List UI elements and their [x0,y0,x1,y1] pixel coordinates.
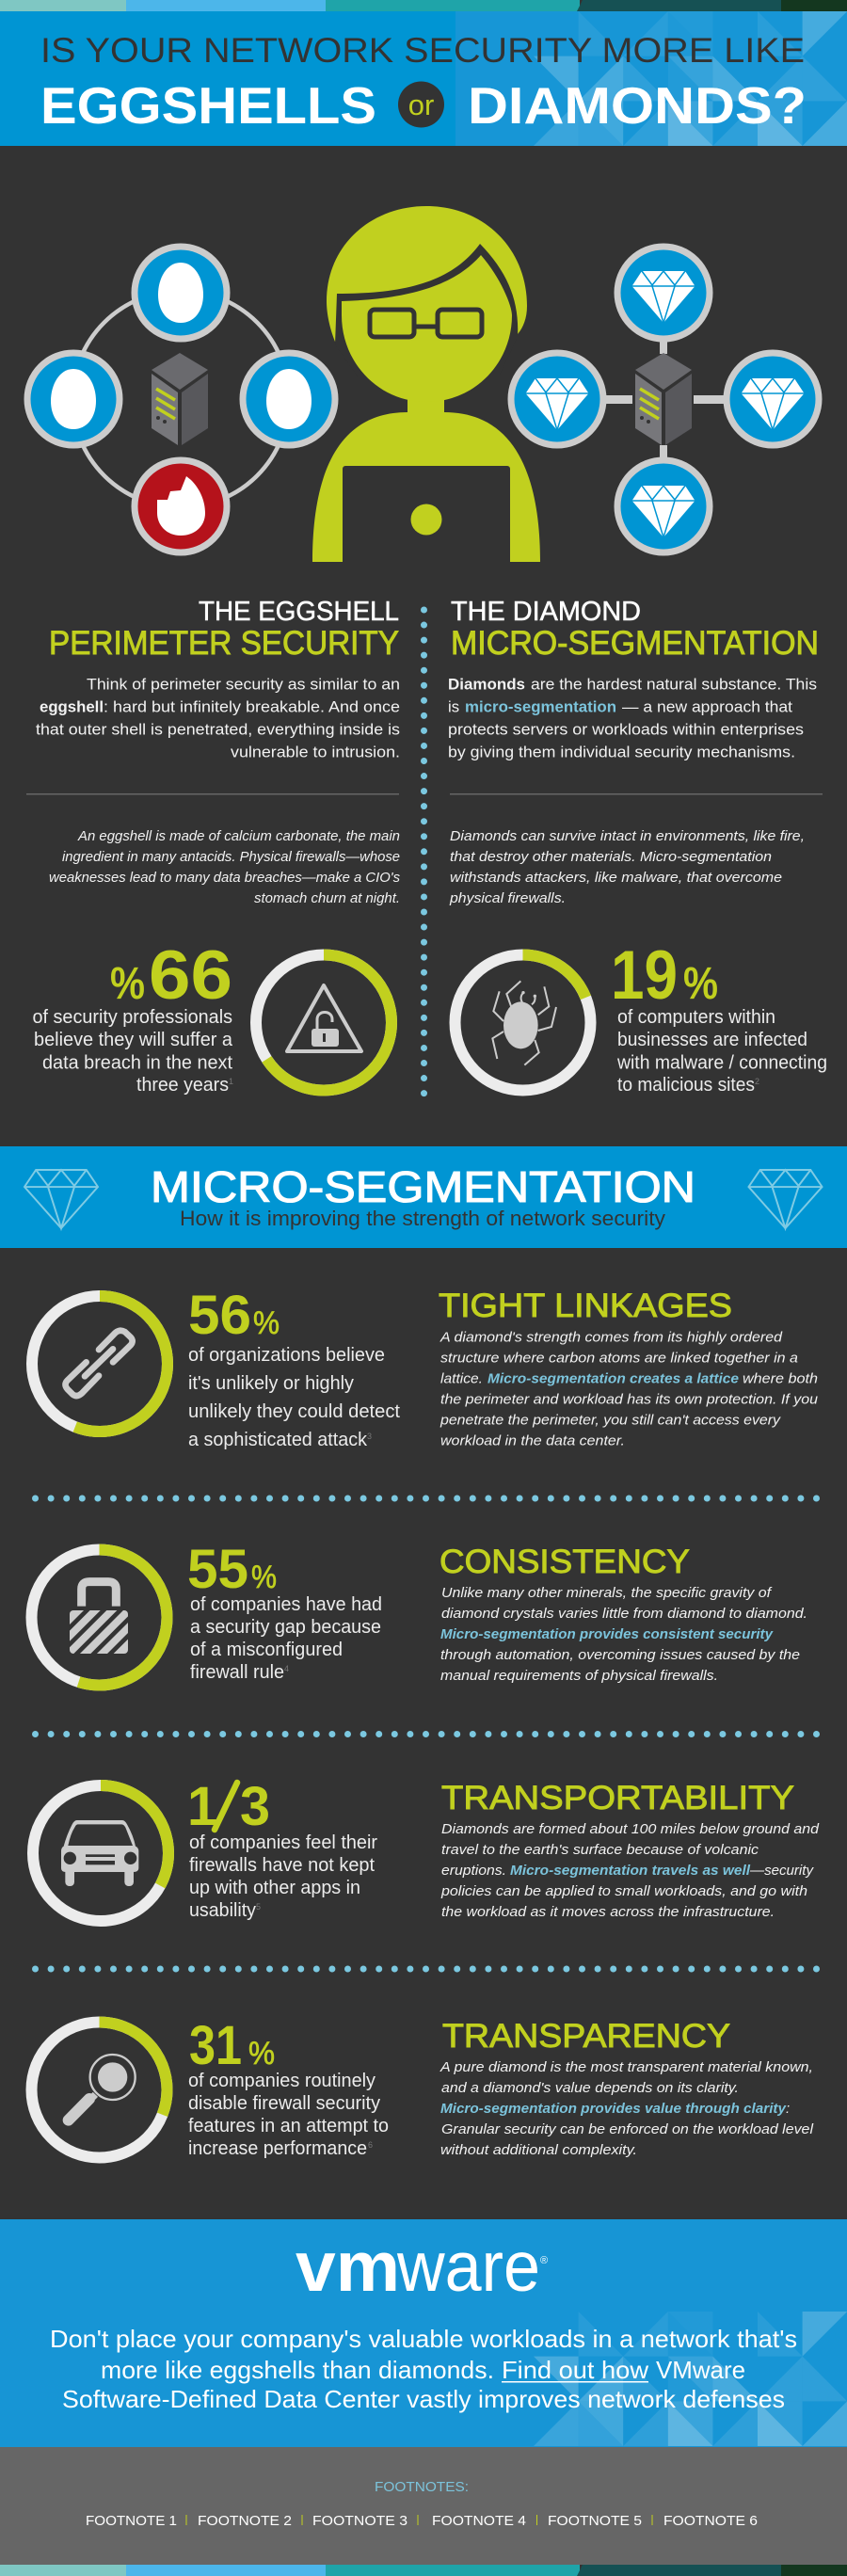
text block: transparency: : [786,2101,790,2117]
icon: striped padlock [70,1577,128,1654]
icon: diamond bottom [617,460,710,552]
stat: one third: of companies feel their [189,1832,377,1853]
text block: eggshell fact [49,828,400,906]
text block: eggshell fact: ingredient in many antacids. Physical firewalls—whose [62,849,400,865]
text block: diamond intro: is [448,698,459,715]
stat: 19 percent: 19 [611,937,678,1014]
text block: diamond fact: withstands attackers, like malware, that overcome [450,870,782,886]
text block: transportability: —security [749,1863,814,1879]
heading: transportability: TRANSPORTABILITY [441,1780,794,1816]
stat: 56 percent: 56 [188,1285,251,1346]
panel: transparency [32,2015,814,2159]
stat: 31 percent: 6 [368,2140,373,2150]
text block: tight linkages: structure where carbon atoms are linked together in a [440,1351,798,1367]
text block: consistency: through automation, overcoming issues caused by the [440,1647,800,1663]
text block: eggshell intro: vulnerable to intrusion. [231,744,400,760]
text block: consistency: Micro-segmentation provides consistent security [440,1626,774,1642]
stat: 31 percent: 31 [189,2015,242,2076]
text block: call to action: Don't place your company's valuable workloads in a network that's [50,2325,797,2353]
panel: eggshell perimeter security [26,597,400,1096]
text block: transportability: the workload as it moves across the infrastructure. [441,1904,775,1920]
text block: eggshell intro [36,676,400,760]
text block: transparency: and a diamond's value depends on its clarity. [441,2080,739,2096]
stat: one third [187,1776,377,1921]
stat: 66 percent: data breach in the next [42,1052,232,1073]
text block: call to action [50,2325,797,2413]
text block: eggshell fact: An eggshell is made of calcium carbonate, the main [77,828,400,844]
text block: tight linkages: where both [743,1371,818,1387]
heading: tight linkages: TIGHT LINKAGES [439,1288,732,1324]
text block: eggshell fact: stomach churn at night. [254,890,400,906]
footnote list [86,2513,758,2529]
text block: tight linkages [439,1330,819,1449]
text block: consistency: diamond crystals varies little from diamond to diamond. [441,1606,807,1622]
stat: 19 percent: % [683,959,718,1009]
stat: one third: 5 [256,1902,261,1912]
text block: diamond intro: are the hardest natural substance. This [531,676,817,693]
stat: 55 percent: % [251,1560,277,1595]
banner subtitle: How it is improving the strength of network security [180,1207,665,1230]
icon: diamond outline left [24,1170,98,1228]
stat: 19 percent: with malware / connecting [616,1052,827,1073]
icon: cracked egg [135,460,227,552]
stat: 66 percent: 1 [229,1077,233,1086]
chart: 56 percent ring [32,1296,168,1432]
illustration: person with laptop [301,206,555,573]
title word: diamonds: DIAMONDS? [468,76,807,135]
panel: tight linkages [32,1285,819,1450]
heading: transparency: TRANSPARENCY [442,2018,730,2055]
panel: header [0,11,847,146]
text block: call to action: VMware [656,2356,745,2384]
stat: 66 percent: % [110,959,145,1009]
heading: micro-segmentation: MICRO-SEGMENTATION [451,625,819,662]
footnote list: FOOTNOTE 2 [198,2513,292,2529]
stat: 55 percent: a security gap because [190,1617,381,1638]
text block: transportability: eruptions. [441,1863,506,1879]
stat: one third: usability [189,1900,256,1921]
text block: call to action: more like eggshells than diamonds. [101,2356,494,2384]
heading: the diamond: THE DIAMOND [451,597,641,627]
icon: magnifying glass [69,2055,136,2120]
text block: diamond intro [448,676,817,760]
text block: eggshell intro: : hard but infinitely breakable. And once [104,698,400,715]
text block: tight linkages: A diamond's strength comes from its highly ordered [439,1330,783,1346]
text block: transportability: travel to the earth's surface because of volcanic [441,1842,759,1858]
badge: or: or [408,88,434,121]
chart: 19 percent ring [455,954,591,1090]
stat: 56 percent: 3 [367,1432,372,1441]
icon: warning lock [287,985,361,1051]
icon: egg right [243,353,335,445]
footnote list: FOOTNOTE 1 [86,2513,177,2529]
stat: 66 percent: three years [136,1075,229,1096]
text block: diamond intro: micro-segmentation [465,698,616,715]
icon: diamond top [617,247,710,339]
stat: 66 percent: of security professionals [32,1007,232,1028]
stat: one third: up with other apps in [189,1878,360,1898]
banner title: MICRO-SEGMENTATION [151,1162,695,1211]
icon: server [635,353,692,445]
text block: transportability [440,1821,820,1920]
stat: 31 percent: disable firewall security [188,2093,380,2114]
text block: call to action: Find out how [502,2356,648,2384]
heading: perimeter security: PERIMETER SECURITY [49,625,399,662]
icon: diamond right [727,353,819,445]
stat: 55 percent: 4 [284,1664,289,1673]
text block: diamond fact: Diamonds can survive intact in environments, like fire, [450,828,805,844]
stat: 55 percent: of companies have had [190,1594,382,1615]
footnote list: FOOTNOTE 4 [432,2513,526,2529]
chart: 31 percent ring [32,2022,168,2157]
text block: diamond fact: that destroy other materials. Micro-segmentation [450,849,772,865]
stat: 31 percent: of companies routinely [188,2071,376,2091]
chart: 55 percent ring [26,1544,173,1690]
illustration: diamond network [511,247,819,552]
panel: diamond micro-segmentation [448,597,827,1096]
text block: transportability: policies can be applied to small workloads, and go with [440,1883,807,1899]
illustration: eggshell network [27,247,335,552]
top colour band [0,0,847,11]
icon: glasses [370,310,482,337]
stat: 19 percent: 2 [755,1077,759,1086]
icon: chain link [65,1331,133,1396]
text block: tight linkages: workload in the data center. [440,1433,625,1449]
stat: 55 percent: of a misconfigured [190,1640,343,1660]
text block: transparency: Granular security can be enforced on the workload level [441,2121,814,2137]
text block: diamond intro: Diamonds [448,676,525,693]
stat: 66 percent: 66 [149,937,232,1014]
footnote list: FOOTNOTE 3 [312,2513,408,2529]
stat: 56 percent [188,1285,400,1450]
text block: diamond fact [449,828,805,906]
stat: 19 percent: of computers within [617,1007,775,1028]
text block: diamond fact: physical firewalls. [449,890,566,906]
icon: egg left [27,353,120,445]
footnotes heading: FOOTNOTES: [375,2479,469,2495]
text block: transparency: Micro-segmentation provides value through clarity [440,2101,787,2117]
stat: 56 percent: it's unlikely or highly [188,1373,354,1394]
text block: tight linkages: the perimeter and workload has its own protection. If you [440,1392,819,1408]
panel: footnotes [0,2447,847,2565]
text block: tight linkages: lattice. [440,1371,483,1387]
icon: diamond left [511,353,603,445]
chart: 66 percent ring [256,954,392,1090]
text block: transportability: Micro-segmentation travels as well [510,1863,751,1879]
text block: transparency: without additional complexity. [440,2142,637,2158]
panel: transportability [33,1776,820,1921]
text block: eggshell intro: that outer shell is penetrated, everything inside is [36,721,400,738]
stat: 56 percent: of organizations believe [188,1345,385,1366]
panel: call to action [0,2219,847,2447]
text block: diamond intro: protects servers or workloads within enterprises [448,721,804,738]
text block: transparency: A pure diamond is the most transparent material known, [439,2059,813,2075]
icon: egg top [135,247,227,339]
logo: vmware: vm [296,2227,400,2306]
stat: 55 percent [187,1539,382,1683]
stat: 31 percent: features in an attempt to [188,2116,389,2136]
icon: server [152,353,208,445]
title word: eggshells: EGGSHELLS [40,76,376,135]
badge: or [398,81,444,128]
text block: call to action: Software-Defined Data Center vastly improves network defenses [62,2385,785,2413]
logo: vmware: ® [540,2255,548,2266]
stat: one third: firewalls have not kept [189,1855,375,1876]
stat: 56 percent: a sophisticated attack [188,1430,368,1450]
stat: 19 percent [611,937,827,1096]
text block: consistency: manual requirements of physical firewalls. [440,1668,718,1684]
stat: 55 percent: firewall rule [190,1662,284,1683]
text block: transportability: Diamonds are formed about 100 miles below ground and [441,1821,820,1837]
panel: micro-segmentation banner [0,1146,847,1248]
logo: vmware: ware [396,2227,540,2306]
heading: consistency: CONSISTENCY [439,1544,690,1580]
icon: car [61,1820,138,1886]
stat: 56 percent: % [253,1305,280,1341]
text block: eggshell fact: weaknesses lead to many data breaches—make a CIO's [49,870,400,886]
icon: diamond outline right [748,1170,823,1228]
icon: bug [492,981,556,1065]
stat: 19 percent: to malicious sites [617,1075,755,1096]
stat: 66 percent: believe they will suffer a [34,1030,233,1050]
text block: diamond intro: — a new approach that [622,698,792,715]
heading: the eggshell: THE EGGSHELL [199,597,399,627]
chart: one third ring [33,1785,168,1921]
stat: 66 percent [32,937,233,1096]
stat: one third: 1 [187,1776,217,1837]
stat: 19 percent: businesses are infected [617,1030,807,1050]
text block: eggshell intro: eggshell [40,698,104,715]
stat: 31 percent: % [248,2036,275,2072]
text block: tight linkages: penetrate the perimeter, you still can't access every [439,1413,782,1429]
logo: vmware [296,2227,548,2306]
stat: 56 percent: unlikely they could detect [188,1401,400,1422]
title line 1: IS YOUR NETWORK SECURITY MORE LIKE [40,31,805,70]
text block: consistency [440,1585,807,1684]
stat: 55 percent: 55 [187,1539,248,1600]
stat: 31 percent: increase performance [188,2138,367,2159]
stat: one third: 3 [240,1776,270,1837]
text block: tight linkages: Micro-segmentation creates a lattice [487,1371,739,1387]
text block: diamond intro: by giving them individual security mechanisms. [448,744,795,760]
panel: consistency [26,1544,806,1690]
text block: transparency [439,2059,814,2158]
footnote list: FOOTNOTE 5 [548,2513,642,2529]
bottom colour band [0,2565,847,2576]
stat: 31 percent [188,2015,389,2159]
footnote list: FOOTNOTE 6 [663,2513,758,2529]
text block: consistency: Unlike many other minerals, the specific gravity of [441,1585,773,1601]
text block: eggshell intro: Think of perimeter security as similar to an [87,676,400,693]
